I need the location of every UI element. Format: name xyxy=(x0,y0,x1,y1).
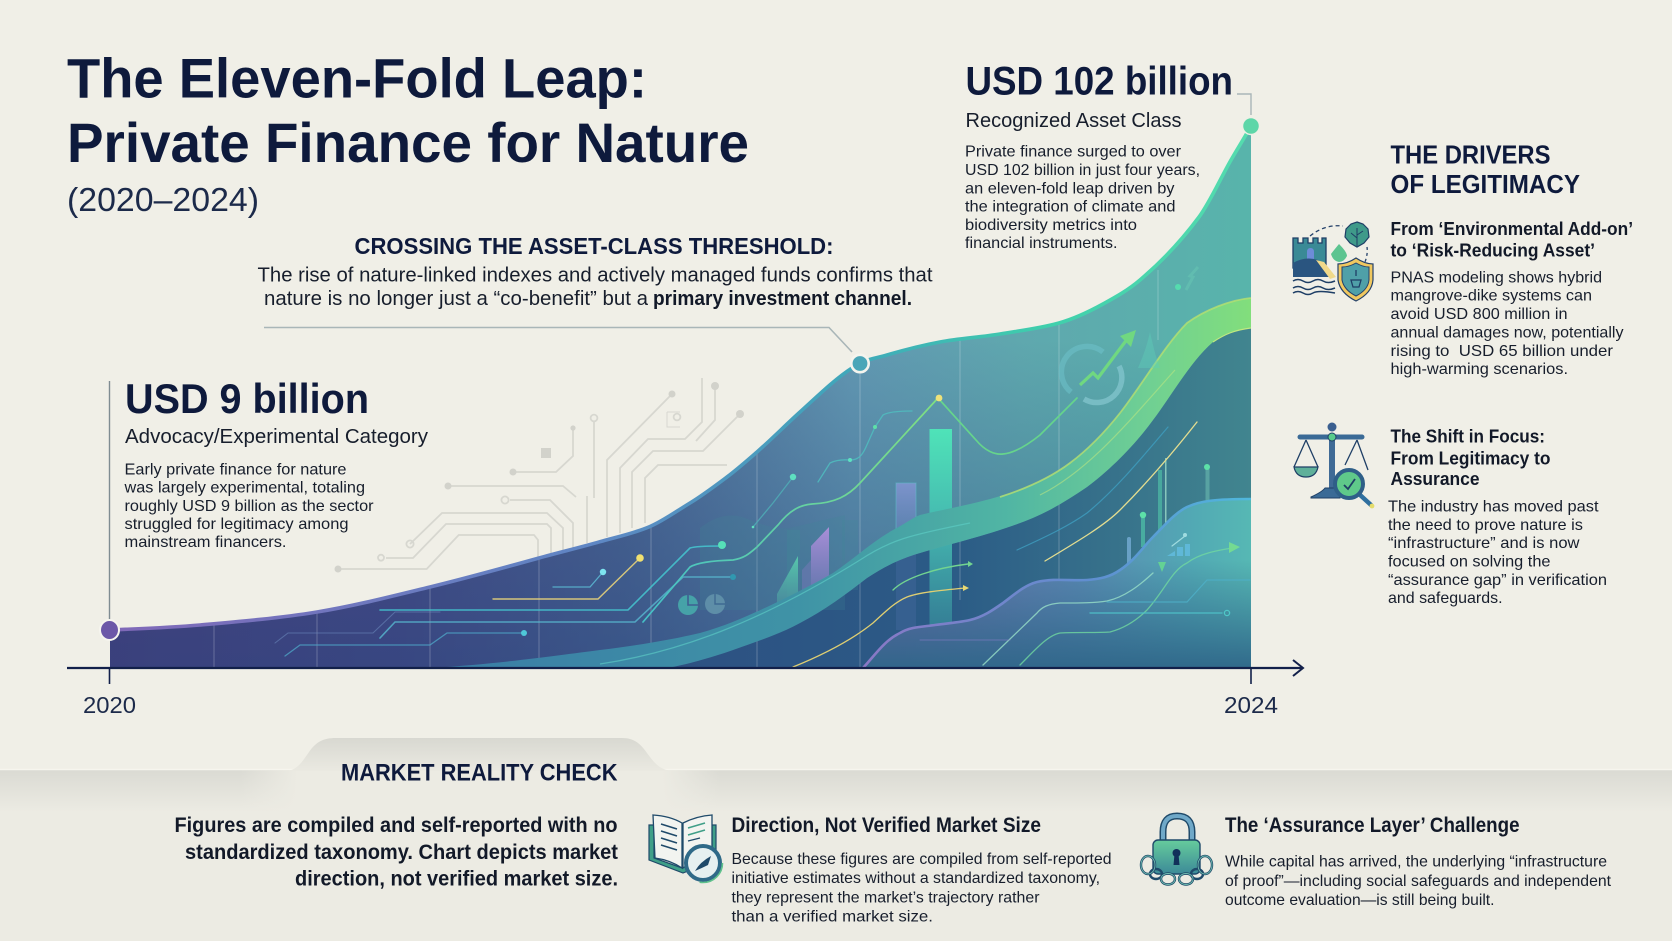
text block: the assurance layer challenge: of proof”—including social safeguards and independent xyxy=(1225,873,1612,890)
dark lower band xyxy=(675,328,1251,667)
driver 2 text: the need to prove nature is xyxy=(1388,517,1583,534)
title xyxy=(67,46,749,218)
driver 1 text xyxy=(1390,218,1633,378)
driver 2 text: From Legitimacy to xyxy=(1390,447,1550,468)
heading: the drivers of legitimacy xyxy=(1390,140,1580,199)
driver 2 text: The Shift in Focus: xyxy=(1390,426,1545,447)
icon: open book and pen badge xyxy=(649,815,722,882)
text block: USD 9 billion: Advocacy/Experimental Category xyxy=(125,425,429,448)
icon: castle, shield and tree xyxy=(1293,222,1373,301)
text block: USD 9 billion: was largely experimental, totaling xyxy=(123,480,365,497)
start marker: 2020 xyxy=(100,381,119,640)
callout: crossing the asset-class threshold: CROSSING THE ASSET-CLASS THRESHOLD: xyxy=(354,233,834,259)
circuit traces decoration xyxy=(334,378,744,572)
callout: crossing the asset-class threshold xyxy=(258,233,933,310)
curve top edge xyxy=(110,126,1251,630)
driver 2 text xyxy=(1388,426,1607,607)
heading: the drivers of legitimacy: OF LEGITIMACY xyxy=(1390,169,1580,199)
text block: USD 102 billion: USD 102 billion in just four years, xyxy=(965,162,1200,179)
soft background shapes xyxy=(756,523,845,610)
text block: USD 9 billion: USD 9 billion xyxy=(125,375,369,422)
heading: market reality check: MARKET REALITY CHECK xyxy=(341,760,618,787)
driver 1 text: mangrove-dike systems can xyxy=(1390,288,1592,305)
text block: USD 102 billion: Recognized Asset Class xyxy=(966,109,1182,132)
text block: USD 9 billion xyxy=(123,375,429,551)
callout: crossing the asset-class threshold: The rise of nature-linked indexes and actively managed funds confirms that xyxy=(258,264,933,286)
driver 1 text: annual damages now, potentially xyxy=(1390,324,1624,341)
text block: USD 9 billion: Early private finance for nature xyxy=(124,462,347,478)
axis label: 2020: 2020 xyxy=(83,692,136,718)
text block: USD 9 billion: struggled for legitimacy among xyxy=(124,516,348,533)
text block: direction, not verified market size: Because these figures are compiled from self-reported xyxy=(732,851,1112,868)
driver 1 text: to ‘Risk-Reducing Asset’ xyxy=(1390,240,1595,261)
callout leader line xyxy=(264,328,852,352)
heading: the drivers of legitimacy: THE DRIVERS xyxy=(1390,140,1550,170)
icon: growth ring and arrow xyxy=(1061,267,1198,403)
text block: direction, not verified market size: initiative estimates without a standardized taxonomy, xyxy=(732,870,1100,887)
axis label: 2024: 2024 xyxy=(1224,692,1278,718)
ribbon band xyxy=(430,298,1251,668)
text block: USD 102 billion: the integration of climate and xyxy=(965,199,1176,216)
hill band xyxy=(863,499,1251,668)
driver 2 text: and safeguards. xyxy=(1388,590,1502,607)
driver 1 text: rising to USD 65 billion under xyxy=(1390,343,1614,360)
text block: USD 102 billion: biodiversity metrics into xyxy=(965,217,1137,234)
text block: market reality summary: direction, not verified market size. xyxy=(295,867,618,891)
text block: the assurance layer challenge xyxy=(1225,814,1612,909)
driver 2 text: “assurance gap” in verification xyxy=(1388,572,1607,589)
text block: direction, not verified market size: than a verified market size. xyxy=(732,908,933,926)
callout: crossing the asset-class threshold: nature is no longer just a “co-benefit” but a xyxy=(264,287,649,310)
vertical gridlines xyxy=(214,320,1059,668)
driver 2 text: Assurance xyxy=(1390,468,1480,489)
circuit lines in the chart xyxy=(275,398,1197,667)
text block: USD 102 billion xyxy=(965,60,1233,252)
panel: the drivers of legitimacy xyxy=(1293,140,1633,607)
text block: USD 9 billion: mainstream financers. xyxy=(124,534,286,551)
panel: market reality check background xyxy=(0,738,1672,941)
text block: direction, not verified market size xyxy=(732,814,1112,926)
icon: padlock with chains xyxy=(1141,816,1212,884)
driver 2 text: “infrastructure” and is now xyxy=(1388,535,1580,552)
title: Private Finance for Nature xyxy=(67,111,749,174)
text block: USD 102 billion: financial instruments. xyxy=(965,235,1118,252)
text block: USD 102 billion: Private finance surged to over xyxy=(965,144,1182,161)
driver 2 text: The industry has moved past xyxy=(1388,499,1599,516)
end marker: 2024 xyxy=(1237,94,1260,134)
title: (2020–2024) xyxy=(67,181,259,218)
text block: market reality summary: standardized taxonomy. Chart depicts market xyxy=(185,840,618,864)
callout: crossing the asset-class threshold: primary investment channel. xyxy=(653,287,912,310)
hill lines and arrows xyxy=(920,533,1250,665)
text block: the assurance layer challenge: outcome evaluation—is still being built. xyxy=(1225,892,1494,909)
text block: market reality summary: Figures are compiled and self-reported with no xyxy=(174,813,618,837)
title: The Eleven-Fold Leap: xyxy=(67,46,647,110)
driver 2 text: focused on solving the xyxy=(1388,554,1551,571)
axis xyxy=(67,660,1303,684)
icon: scales and magnifier xyxy=(1294,422,1374,508)
text block: the assurance layer challenge: The ‘Assurance Layer’ Challenge xyxy=(1225,814,1520,837)
icon: pie charts xyxy=(678,594,725,615)
driver 1 text: PNAS modeling shows hybrid xyxy=(1390,270,1602,287)
area chart: growth from USD 9 billion to USD 102 billion xyxy=(110,120,1251,669)
text block: market reality summary xyxy=(174,813,618,891)
text block: direction, not verified market size: they represent the market’s trajectory rather xyxy=(732,890,1040,906)
text block: USD 102 billion: an eleven-fold leap driven by xyxy=(965,180,1174,197)
text block: the assurance layer challenge: While capital has arrived, the underlying “infrastructure xyxy=(1225,854,1607,871)
driver 1 text: avoid USD 800 million in xyxy=(1390,306,1568,323)
data bars xyxy=(777,429,1210,669)
driver 1 text: high-warming scenarios. xyxy=(1390,361,1568,378)
driver 1 text: From ‘Environmental Add-on’ xyxy=(1390,218,1633,239)
text block: USD 9 billion: roughly USD 9 billion as the sector xyxy=(124,498,374,515)
text block: USD 102 billion: USD 102 billion xyxy=(966,60,1233,104)
text block: direction, not verified market size: Direction, Not Verified Market Size xyxy=(732,814,1041,837)
midpoint marker xyxy=(851,355,869,372)
chart dots xyxy=(521,284,1181,636)
